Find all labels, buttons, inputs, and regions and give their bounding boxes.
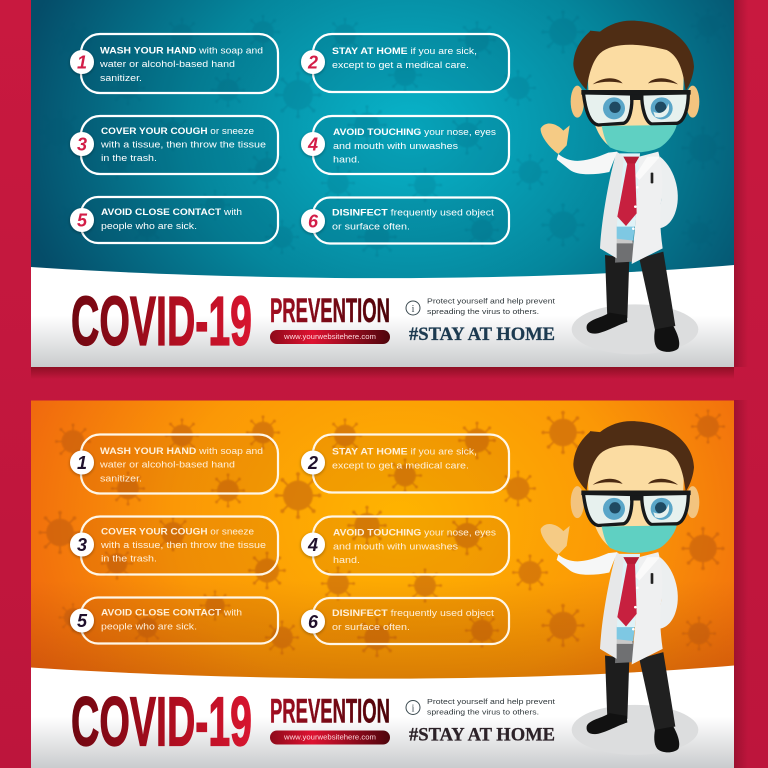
tip 4: AVOID TOUCHING your nose, eyes	[333, 127, 496, 138]
tip 5: AVOID CLOSE CONTACT with	[101, 207, 242, 218]
protect yourself note: spreading the virus to others.	[427, 708, 539, 716]
tip 3	[70, 116, 278, 174]
tip 2: 2	[307, 453, 318, 473]
tip 4: 4	[307, 134, 318, 154]
tip 5: AVOID CLOSE CONTACT with	[101, 608, 242, 618]
tip 2	[301, 34, 509, 92]
tip 2: 2	[307, 52, 318, 72]
tip 1: water or alcohol-based hand	[99, 59, 235, 70]
icon: info: i	[412, 304, 415, 315]
tip 3: with a tissue, then throw the tissue	[100, 140, 266, 150]
tip 6: 6	[308, 612, 319, 632]
tip 4: hand.	[333, 555, 360, 566]
tip 4: hand.	[333, 154, 360, 166]
tip 3: COVER YOUR COUGH or sneeze	[101, 526, 254, 538]
tip 5: people who are sick.	[101, 221, 197, 232]
tip 1: sanitizer.	[100, 73, 142, 84]
icon: info	[406, 301, 420, 315]
protect yourself note: Protect yourself and help prevent	[427, 697, 556, 706]
panel: teal poster	[31, 0, 734, 367]
shadow right of orange poster	[734, 400, 748, 768]
protect yourself note: spreading the virus to others.	[427, 307, 539, 316]
tip 1: sanitizer.	[100, 474, 142, 484]
tip 3: with a tissue, then throw the tissue	[100, 540, 266, 551]
tip 5: 5	[77, 210, 88, 230]
tip 1: 1	[77, 453, 87, 473]
icon: info: i	[412, 704, 415, 714]
heading: PREVENTION: PREVENTION	[270, 292, 390, 330]
tip 1: 1	[77, 52, 87, 72]
tip 5	[70, 197, 278, 243]
teal background	[31, 0, 734, 367]
tip 2: STAY AT HOME if you are sick,	[332, 46, 477, 57]
icon: info	[406, 700, 420, 714]
tip 1	[70, 34, 278, 93]
tip 6: 6	[308, 212, 319, 232]
white footer band	[31, 265, 734, 367]
title: COVID-19: COVID-19	[71, 682, 252, 760]
protect yourself note	[427, 296, 556, 316]
protect yourself note: Protect yourself and help prevent	[427, 296, 556, 306]
tip 6	[301, 198, 509, 244]
website pill: www.yourwebsitehere.com	[283, 332, 376, 341]
tip 4: 4	[307, 535, 318, 555]
hashtag: stay at home: #STAY AT HOME	[409, 324, 555, 345]
doctor illustration	[541, 421, 699, 755]
tip 6: DISINFECT frequently used object	[332, 208, 494, 218]
orange background	[31, 400, 734, 768]
tip 6: or surface often.	[332, 622, 410, 633]
tip 4: AVOID TOUCHING your nose, eyes	[333, 528, 496, 538]
tip 5: people who are sick.	[101, 622, 197, 632]
title: COVID-19: COVID-19	[71, 282, 252, 360]
website pill	[270, 730, 390, 744]
white footer band	[31, 666, 734, 768]
panel: orange poster	[31, 400, 734, 768]
tip 5	[70, 598, 278, 644]
tip 6: or surface often.	[332, 222, 410, 232]
tip 3: in the trash.	[101, 554, 157, 564]
virus pattern	[220, 17, 578, 256]
tip 6	[301, 598, 509, 644]
tip 6: DISINFECT frequently used object	[332, 608, 494, 619]
tip 4	[301, 116, 509, 174]
shadow right of teal poster	[734, 0, 748, 367]
tip 2: except to get a medical care.	[332, 60, 469, 71]
heading: PREVENTION: PREVENTION	[270, 692, 390, 730]
tip 2: except to get a medical care.	[332, 460, 469, 472]
tip 1: water or alcohol-based hand	[99, 460, 235, 470]
tip 2: STAY AT HOME if you are sick,	[332, 446, 477, 458]
lower shading	[31, 400, 734, 700]
tip 4: and mouth with unwashes	[333, 542, 458, 552]
tip 1: WASH YOUR HAND with soap and	[100, 46, 263, 56]
website pill: www.yourwebsitehere.com	[283, 732, 376, 741]
tip 4	[301, 516, 509, 574]
shadow below teal poster	[31, 367, 734, 379]
virus pattern	[38, 409, 725, 657]
tip 2	[301, 434, 509, 492]
tip 3	[70, 516, 278, 574]
tip 3: COVER YOUR COUGH or sneeze	[101, 126, 254, 137]
tip 5: 5	[77, 611, 88, 631]
doctor illustration	[541, 21, 699, 354]
tip 4: and mouth with unwashes	[333, 141, 458, 152]
hashtag: stay at home: #STAY AT HOME	[409, 724, 555, 746]
tip 1: WASH YOUR HAND with soap and	[100, 446, 263, 457]
tip 1	[70, 434, 278, 494]
website pill	[270, 330, 390, 344]
protect yourself note	[427, 697, 556, 716]
tip 3: 3	[77, 134, 87, 154]
tip 3: in the trash.	[101, 153, 157, 164]
tip 3: 3	[77, 535, 87, 555]
